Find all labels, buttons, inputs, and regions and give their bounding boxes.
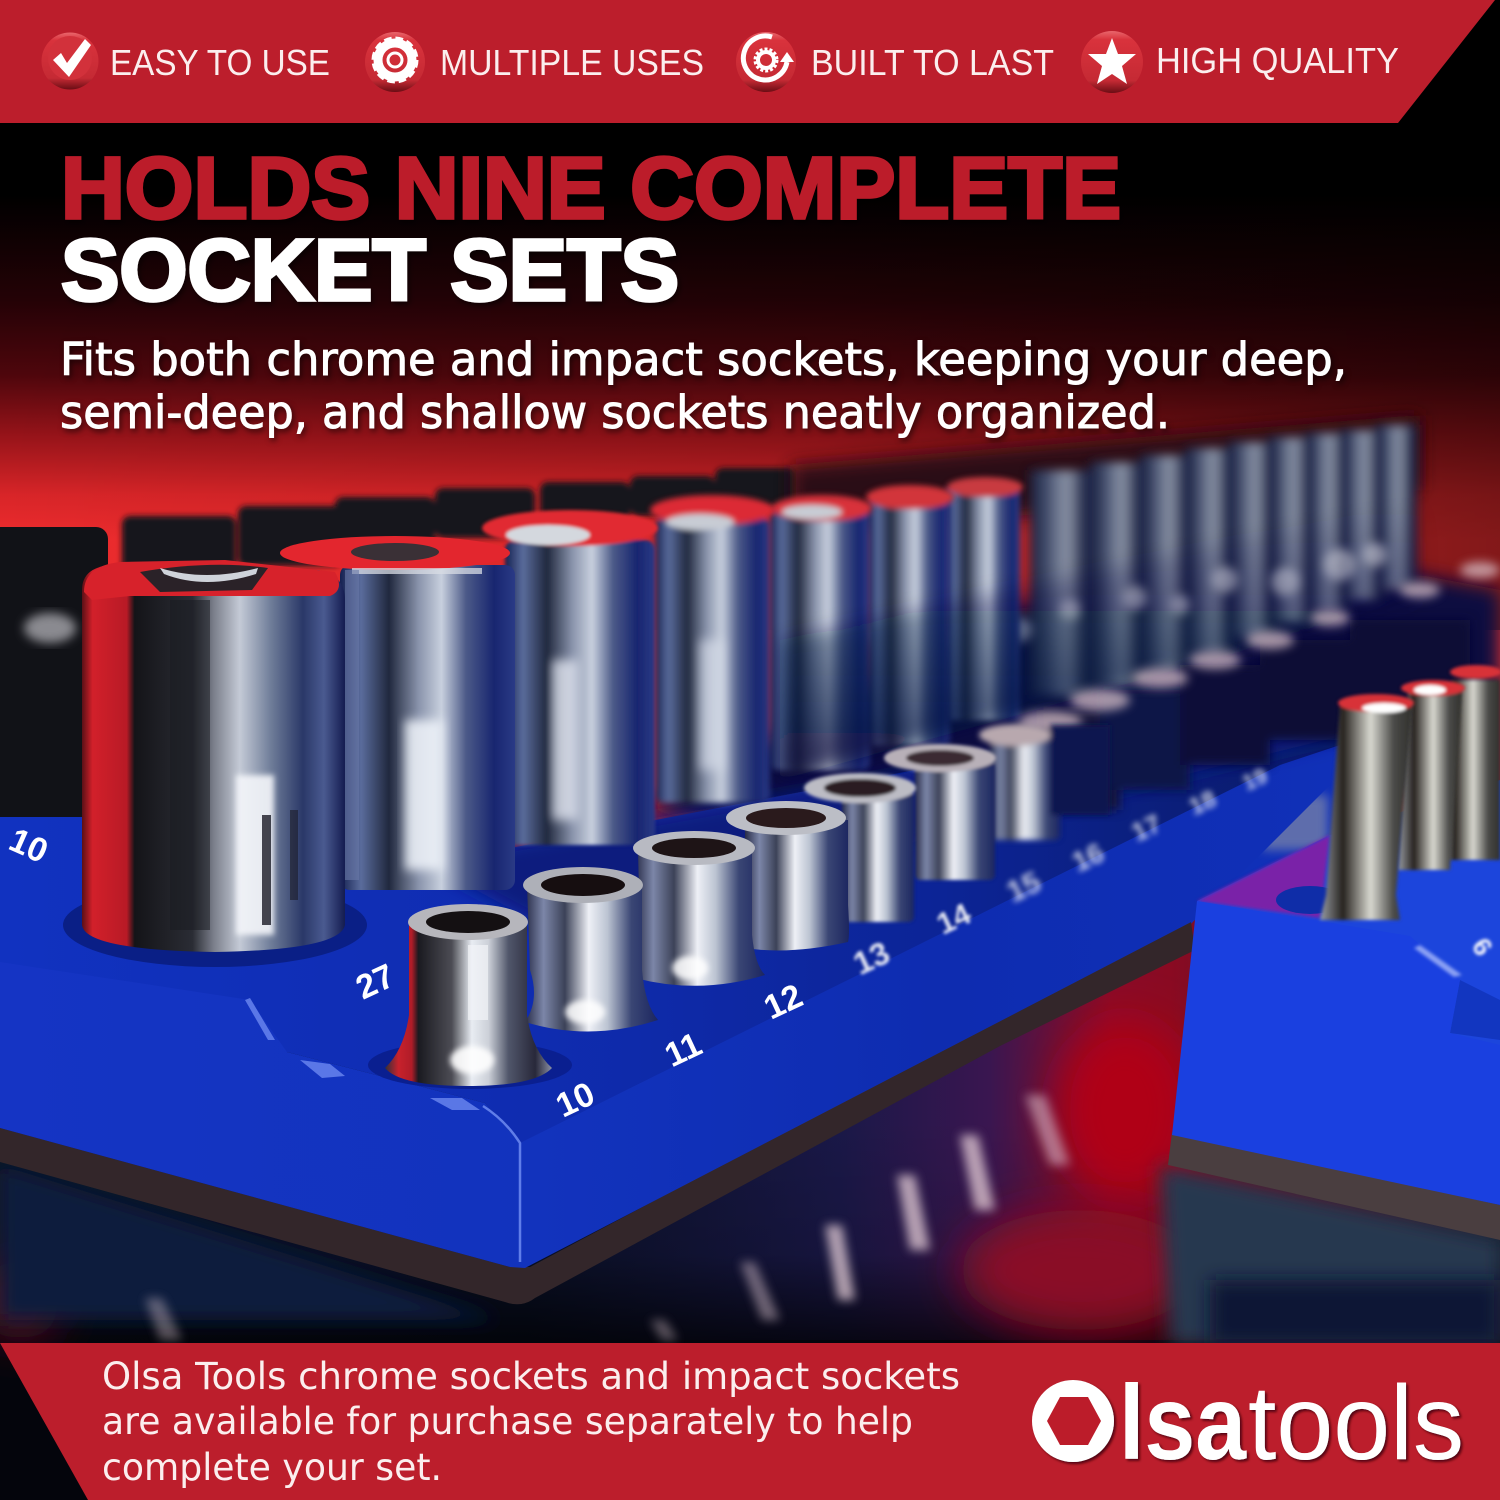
logo: Olsatools: [1032, 1364, 1464, 1482]
heading: [61, 140, 1121, 319]
tray size labels: 18: [1185, 785, 1221, 821]
tray size labels: 16: [1067, 837, 1109, 878]
second tray: front face: [1172, 901, 1500, 1205]
tray: side lettering blur: [1262, 795, 1328, 850]
small socket 7: [979, 724, 1110, 840]
bottom banner: [0, 1343, 1500, 1500]
second tray: back top surface: [1197, 780, 1500, 1060]
bokeh highlights on distant sockets: [796, 543, 1387, 674]
tray size labels: 17: [1127, 808, 1166, 848]
logo: Olsatools: lsa: [1119, 1364, 1247, 1482]
small socket 6: [884, 744, 996, 880]
logo: Olsatools: O: [1036, 1365, 1110, 1481]
lower fade on distant sockets: [780, 500, 1420, 780]
distant dark sockets behind chrome row: [0, 415, 1420, 817]
heading line 2: SOCKET SETS: [61, 222, 679, 319]
logo: Olsatools: tools: [1248, 1364, 1464, 1482]
label: easy to use: EASY TO USE: [110, 42, 330, 83]
tray size labels: 19: [1238, 763, 1271, 796]
note text: are available for purchase separately to help: [102, 1400, 913, 1443]
floor reflections of sockets: [145, 1095, 1070, 1340]
tray: socket well for large socket: [63, 883, 367, 967]
distant sockets blurred: [1030, 425, 1417, 695]
badge: multiple uses: [365, 32, 425, 92]
small socket 2: [523, 867, 658, 1032]
small socket 3: [633, 831, 765, 986]
heading line 1: HOLDS NINE COMPLETE: [61, 140, 1121, 237]
socket 7: [945, 477, 1023, 720]
distant small sockets blurred: [1040, 620, 1470, 810]
badge: high quality: [1081, 31, 1143, 93]
note text: complete your set.: [102, 1446, 442, 1489]
tray size labels: 15: [1002, 865, 1046, 909]
tray size labels: 13: [848, 934, 895, 982]
badge: easy to use: [42, 32, 98, 90]
chrome deep socket row, receding: [82, 425, 1420, 952]
second tray: foam base: [1168, 1132, 1500, 1240]
top banner: [0, 0, 1495, 123]
tray: far end block: [1190, 760, 1345, 925]
second tray: socket 2: [1398, 680, 1465, 870]
socket 3: [482, 510, 658, 845]
black impact socket, left: [0, 527, 108, 817]
second tray: glint and label 6: 6: [1466, 932, 1499, 961]
far back row blur: [790, 415, 1420, 530]
small chrome socket row, receding: [385, 562, 1500, 1086]
tray: magnetic foam base: [0, 915, 1195, 1304]
small socket 1, front: [385, 904, 552, 1086]
small socket 4: [726, 801, 849, 950]
back row of dark sockets: [122, 468, 795, 586]
socket 6: [866, 485, 954, 745]
dark navy shadow zone behind receding rows: [640, 575, 1500, 850]
label: built to last: BUILT TO LAST: [811, 42, 1054, 83]
reflective workbench floor: [0, 900, 1500, 1500]
distant rim bokeh: [1018, 562, 1500, 733]
label: high quality: HIGH QUALITY: [1156, 40, 1399, 81]
tray: socket well for small socket: [368, 1041, 572, 1089]
tray size labels: 10: [3, 821, 53, 871]
note text: [102, 1355, 960, 1489]
second socket tray, right foreground: [1168, 665, 1500, 1240]
note text: Olsa Tools chrome sockets and impact sockets: [102, 1355, 960, 1398]
tray size labels: [3, 763, 1271, 1125]
badge: built to last: [736, 32, 796, 92]
subheading: [60, 333, 1347, 439]
tray: front face: [0, 745, 1345, 1268]
second tray: well: [1276, 886, 1344, 914]
socket 5: [770, 495, 872, 770]
second tray: socket 3: [1440, 665, 1500, 860]
tray: corner highlight: [483, 1106, 520, 1262]
tray size labels: 14: [932, 897, 976, 941]
tray size labels: 11: [659, 1025, 708, 1075]
tray: well glints: [245, 998, 480, 1110]
second tray: glint and label 6: [1414, 932, 1499, 977]
socket 2: [280, 536, 515, 890]
small socket 5: [804, 773, 916, 922]
tray: dark band between rows: [420, 695, 1345, 935]
second tray: socket 1: [1320, 694, 1414, 920]
second tray: purple corner reflection: [1197, 835, 1330, 918]
tray size labels: 10: [550, 1075, 601, 1125]
second tray: recess shade: [1450, 980, 1500, 1040]
subheading line 1: Fits both chrome and impact sockets, keeping your deep,: [60, 333, 1347, 386]
socket 1, front large chrome: [82, 560, 345, 952]
tray size labels: 12: [758, 977, 809, 1027]
large socket tray: [0, 690, 1345, 1304]
socket 4: [650, 495, 774, 803]
label: multiple uses: MULTIPLE USES: [440, 42, 704, 83]
tray: top surface: [0, 690, 1345, 1143]
tray size labels: 27: [350, 957, 401, 1007]
subheading line 2: semi-deep, and shallow sockets neatly organized.: [60, 386, 1170, 439]
